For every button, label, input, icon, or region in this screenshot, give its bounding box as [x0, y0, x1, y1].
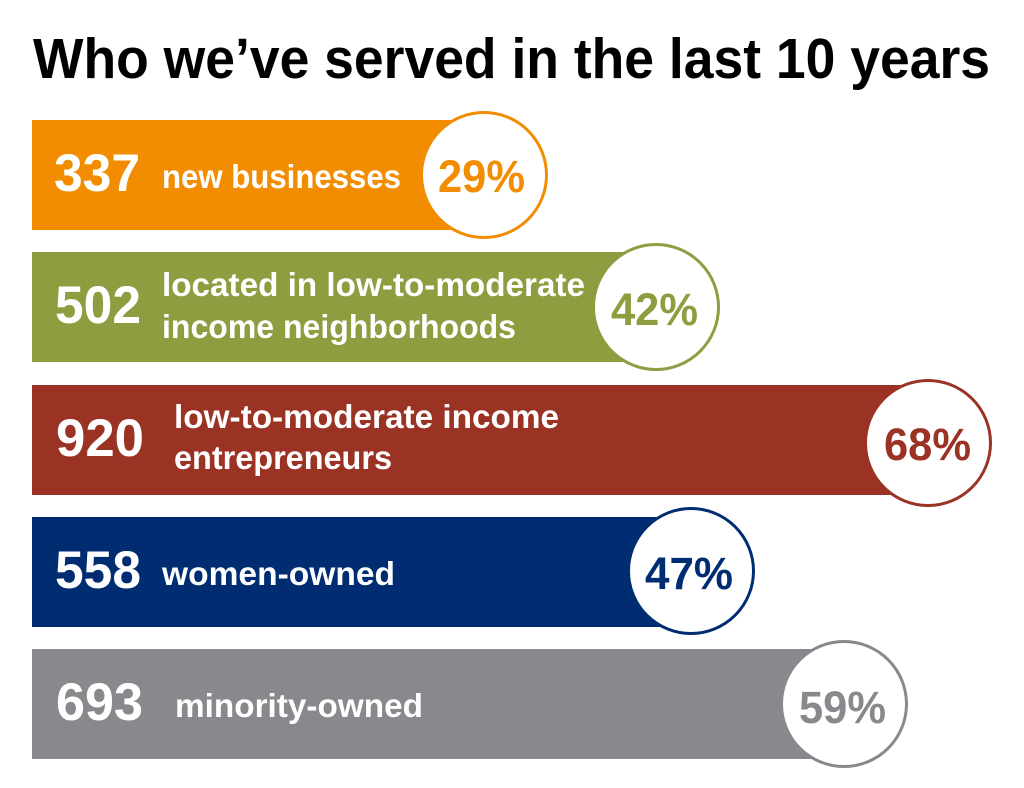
- bar: minority-owned: 59%: [799, 682, 886, 733]
- bar: low-to-moderate neighborhoods: 42%: [611, 284, 698, 335]
- bar: low-to-moderate neighborhoods: [32, 244, 718, 370]
- bar: women-owned: women-owned: [161, 555, 395, 592]
- bar: new businesses: [32, 112, 546, 238]
- bar: low-to-moderate neighborhoods: located in low-to-moderate: [162, 266, 585, 303]
- bar: low-to-moderate entrepreneurs: low-to-moderate income: [174, 398, 559, 435]
- bar: low-to-moderate entrepreneurs: 920: [56, 409, 144, 468]
- bar: new businesses: 337: [54, 144, 140, 203]
- title: Who we’ve served in the last 10 years: [33, 27, 990, 91]
- bar: low-to-moderate neighborhoods: income neighborhoods: [162, 308, 516, 345]
- bar: low-to-moderate neighborhoods: 502: [55, 276, 141, 335]
- bar: low-to-moderate entrepreneurs: [32, 380, 990, 506]
- bar: women-owned: 47%: [645, 548, 733, 599]
- bar: women-owned: [32, 508, 754, 634]
- bar: new businesses: new businesses: [162, 158, 401, 195]
- bar: minority-owned: 693: [56, 673, 143, 732]
- bar: low-to-moderate entrepreneurs: 68%: [884, 419, 971, 470]
- bar: minority-owned: minority-owned: [175, 687, 423, 724]
- bar: low-to-moderate entrepreneurs: entrepreneurs: [174, 439, 392, 476]
- bar: minority-owned: [32, 642, 906, 766]
- bar: women-owned: 558: [55, 541, 141, 600]
- bar: new businesses: 29%: [438, 151, 525, 202]
